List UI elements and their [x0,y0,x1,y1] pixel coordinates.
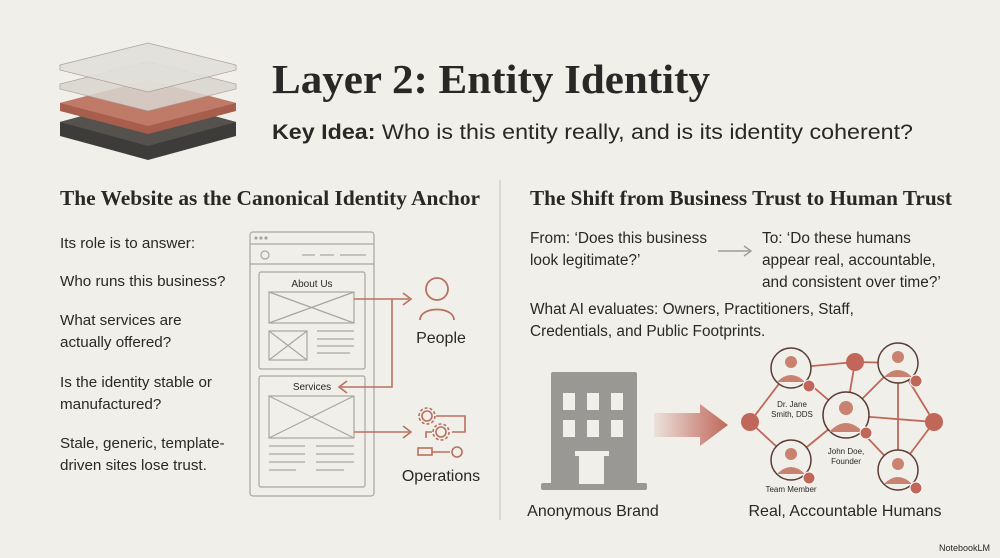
text block: what AI evaluates: What AI evaluates: Owners, Practitioners, Staff, [530,301,854,318]
network: humans: Founder [831,457,861,466]
text: Anonymous Brand [527,503,659,520]
text: About Us [291,279,333,290]
arrow: from to [718,246,751,256]
title: Layer 2: Entity Identity [272,56,711,102]
text block: what AI evaluates: Credentials, and Public Footprints. [530,323,765,340]
text block: from: From: ‘Does this business [530,230,707,247]
network: humans: John Doe, [828,447,864,456]
text block: from [530,230,707,269]
heading: right panel: The Shift from Business Trust to Human Trust [530,186,952,210]
network: humans [741,343,943,494]
icon: building [541,372,647,490]
arrows: website to people/operations [339,293,411,438]
text block: to: To: ‘Do these humans [762,230,911,247]
subtitle: key idea: Key Idea: Who is this entity really, and is its identity coherent? [272,121,913,144]
text block: to [762,230,941,291]
text block: left questions: Its role is to answer: [60,235,195,252]
text: Services [293,382,331,393]
text block: to: and consistent over time?’ [762,274,941,291]
text block: left questions: Is the identity stable or [60,374,212,391]
network: humans: Dr. Jane [777,400,807,409]
text block: left questions: What services are [60,312,182,329]
text block: what AI evaluates [530,301,854,340]
text block: left questions: Stale, generic, template- [60,435,225,452]
text block: to: appear real, accountable, [762,252,936,269]
logo: NotebookLM: NotebookLM [939,543,990,553]
icon: people [420,278,454,320]
network: humans: Team Member [765,485,817,494]
wireframe: website [250,232,374,496]
icon: layer stack [60,43,236,160]
heading: left panel: The Website as the Canonical Identity Anchor [60,186,480,210]
network: humans: Smith, DDS [771,410,813,419]
text: Real, Accountable Humans [748,503,942,520]
text block: left questions: driven sites lose trust. [60,457,207,474]
text: Operations [402,468,480,485]
text: People [416,330,466,347]
icon: operations [418,408,465,457]
text block: from: look legitimate?’ [530,252,640,269]
text block: left questions [60,235,225,474]
text block: left questions: Who runs this business? [60,273,225,290]
text block: left questions: manufactured? [60,396,161,413]
arrow: transition [654,404,728,446]
text block: left questions: actually offered? [60,334,171,351]
